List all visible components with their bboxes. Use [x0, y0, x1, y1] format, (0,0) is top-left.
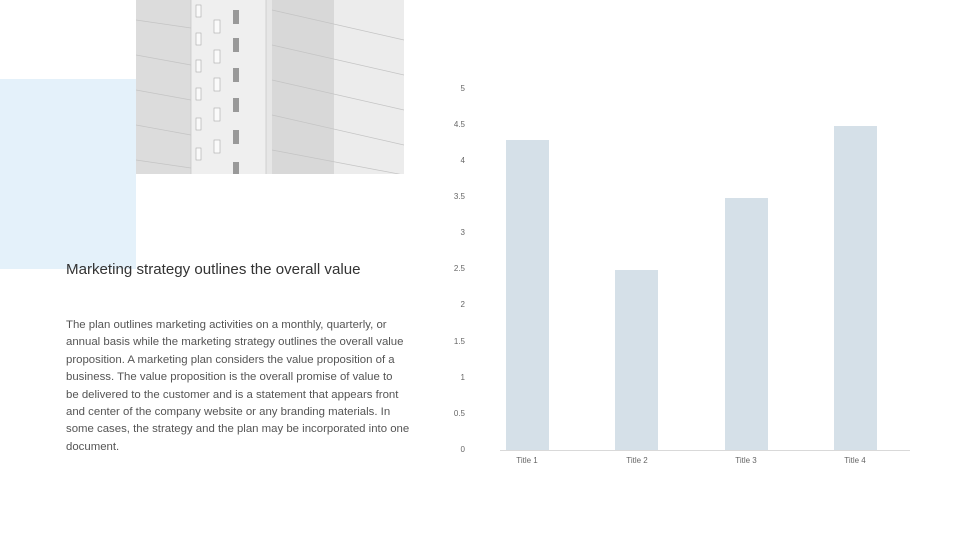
body text: be delivered to the customer and is a statement that appears front: [66, 389, 398, 401]
body text: The plan outlines marketing activities on a monthly, quarterly, or: [66, 319, 387, 331]
body text: document.: [66, 441, 119, 453]
heading: Marketing strategy outlines the overall value: [66, 261, 360, 278]
bar chart: 1.5: [454, 337, 465, 346]
text: Title 4: [844, 456, 866, 465]
bar chart: 0.5: [454, 409, 465, 418]
body text: and center of the company website or any branding materials. In: [66, 406, 390, 418]
y axis labels: [454, 84, 465, 454]
body text: annual basis while the marketing strategy outlines the overall value: [66, 336, 403, 348]
bar chart: 3.5: [454, 192, 465, 201]
image: building facade: [136, 0, 404, 174]
bars: [506, 140, 549, 450]
body text: proposition. A marketing plan considers the value proposition of a: [66, 354, 395, 366]
body text: business. The value proposition is the overall promise of value to: [66, 371, 393, 383]
bar chart: 5: [461, 84, 465, 93]
bar chart: 4.5: [454, 120, 465, 129]
bar chart: 2: [461, 300, 465, 309]
text: Title 3: [735, 456, 757, 465]
bar chart: 1: [461, 373, 465, 382]
bar chart: 4: [461, 156, 465, 165]
bar chart: 3: [461, 228, 465, 237]
x axis labels: Title 1: [516, 456, 538, 465]
bar chart: 2.5: [454, 264, 465, 273]
axis line: [500, 450, 910, 451]
body text: [66, 319, 409, 453]
bar chart: [454, 84, 465, 454]
body text: some cases, the strategy and the plan may be incorporated into one: [66, 423, 409, 435]
decorative light blue block: [0, 79, 136, 269]
bar chart: 0: [461, 445, 465, 454]
text: Title 2: [626, 456, 648, 465]
